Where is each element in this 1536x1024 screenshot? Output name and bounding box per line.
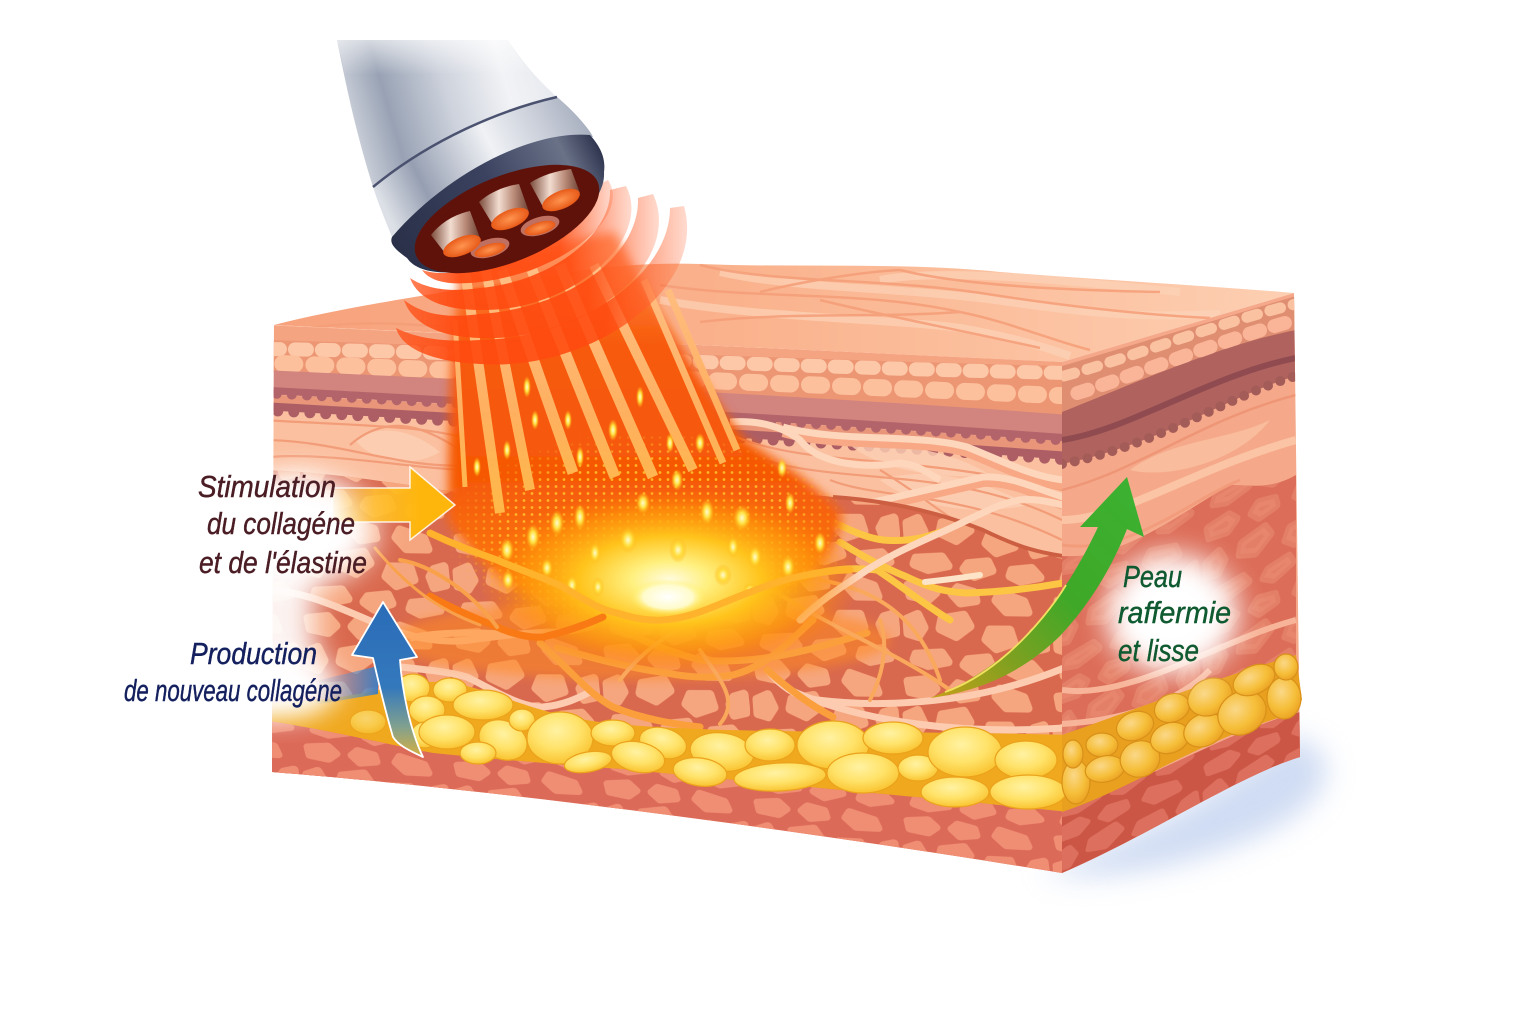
fibres over hotspot bbox=[375, 533, 850, 637]
hotspot glow bbox=[480, 488, 860, 672]
epidermis cells bbox=[262, 325, 1070, 420]
papillary dermis base bbox=[260, 320, 1070, 880]
beam body bbox=[448, 232, 842, 624]
hotspot core bbox=[630, 579, 706, 615]
right face layers bbox=[1060, 290, 1305, 880]
label: result: Peau bbox=[1123, 559, 1182, 594]
infographic: skin cross-section under a treatment handpiece bbox=[124, 40, 1336, 888]
label: result: raffermie bbox=[1118, 595, 1231, 630]
icon: treatment handpiece bbox=[337, 40, 614, 296]
label: stimulation: et de l'élastine bbox=[199, 545, 367, 580]
panel: skin block top surface bbox=[274, 264, 1294, 362]
panel: fat layer bbox=[350, 654, 1302, 812]
arrow: new collagen (blue) bbox=[296, 602, 423, 757]
panel: energy beam and hotspot bbox=[375, 232, 880, 672]
electrode left bbox=[431, 211, 484, 262]
handpiece body bbox=[337, 40, 557, 187]
arrow: firmer skin (green) bbox=[930, 477, 1144, 698]
silver collar bbox=[373, 97, 593, 237]
arrow: stimulation (yellow) bbox=[332, 467, 455, 540]
white halo behind result label bbox=[1106, 554, 1238, 674]
icon: emission waves bbox=[396, 180, 687, 365]
panel: skin block right face bbox=[1060, 290, 1305, 880]
dark rim bbox=[391, 135, 604, 272]
label: production: Production bbox=[190, 636, 317, 671]
hypodermis with cells bbox=[262, 720, 1070, 880]
electrode right bbox=[530, 169, 583, 216]
small electrodes bbox=[468, 212, 562, 262]
white halo behind left labels bbox=[200, 475, 375, 717]
dermis cream bands bbox=[262, 590, 1064, 730]
reticular dermis with cells bbox=[262, 470, 1070, 780]
label: result: et lisse bbox=[1118, 633, 1199, 668]
pigmented band bbox=[262, 370, 1070, 460]
collagen fibres bbox=[540, 499, 1063, 727]
label: production: de nouveau collagéne bbox=[124, 673, 342, 708]
light rays bbox=[455, 265, 737, 513]
tint below the hotspot bbox=[390, 600, 890, 680]
panel: skin block front face bbox=[260, 320, 1070, 880]
ground shadow bbox=[1040, 735, 1326, 876]
sparks bbox=[473, 376, 826, 597]
label: stimulation: Stimulation bbox=[198, 469, 336, 504]
dotted glow field bbox=[452, 436, 846, 606]
electrode centre bbox=[479, 184, 532, 235]
fat base bbox=[262, 682, 1070, 812]
papillary dermis strands bbox=[262, 420, 1063, 545]
label: stimulation: du collagéne bbox=[207, 506, 355, 541]
emitter face bbox=[400, 142, 614, 296]
